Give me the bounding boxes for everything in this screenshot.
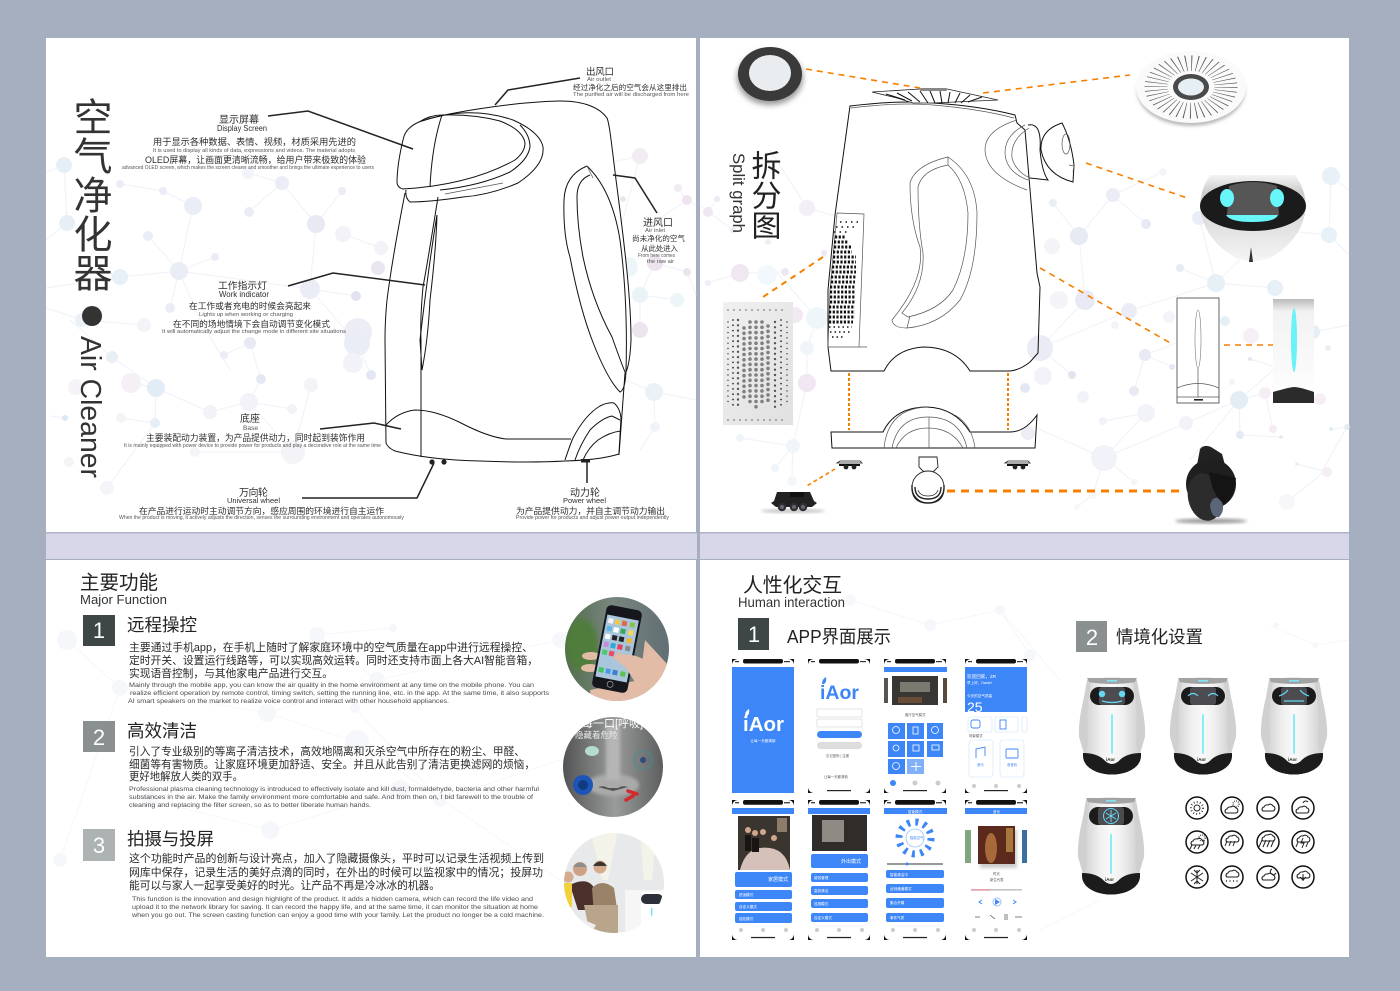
- callout: display screen: advanced OLED screen, which makes the screen clearer and smoother and brings the ultimate experience to users: [122, 165, 374, 171]
- app screen: splash: 让每一天都清新: [750, 738, 776, 743]
- molecule background pattern: [844, 594, 1349, 930]
- callout: base: Base: [243, 425, 258, 432]
- callout: work indicator: [162, 279, 347, 335]
- app screen: sleep mode: 此刻通道模式: [890, 886, 912, 891]
- feature 1: remote control: 1: [93, 618, 105, 643]
- panel: human interaction: [700, 560, 1349, 957]
- feature 3: camera and casting: when you go out. The screen casting function can enjoy a good time with your family. Let the product no longer be a cold machine.: [131, 912, 544, 919]
- heading: major function: [80, 572, 167, 607]
- callout: air inlet: From here comes: [638, 253, 675, 259]
- app screen: music player: 音乐: [993, 809, 1001, 814]
- perforated plate on body: [828, 213, 867, 347]
- app screen: sleep mode: 集合开模: [890, 900, 905, 905]
- app screen: login: iAor: [820, 683, 860, 704]
- orange dashed connectors: [760, 69, 1273, 491]
- app screen: dashboard: 欢迎回家，ZR: [967, 673, 997, 680]
- exploded body line drawing: [828, 88, 1074, 448]
- robot expression: sad: [1261, 678, 1327, 774]
- callout: base: It is mainly equipped with power device to provide power for products and play a decorative role at the same time: [124, 443, 381, 449]
- feature 3: camera and casting: 网库中保存，记录生活的美好点滴的同时，在外出的时候可以监视家中的情况；投屏功: [129, 865, 543, 879]
- callout: universal wheel: Universal wheel: [227, 496, 280, 505]
- feature 1: remote control: [83, 615, 550, 705]
- feature 3: camera and casting: This function is the innovation and design highlight of the product. It adds a hidden camera, which can record the life video and: [132, 896, 533, 903]
- app screen: family mode: 独处模式: [739, 916, 754, 921]
- top vent blade: [872, 88, 998, 103]
- app screen: sleep mode: 智能空气: [910, 835, 924, 840]
- heading: major function: 主要功能: [80, 572, 158, 594]
- callout: work indicator: 工作指示灯: [218, 279, 267, 292]
- title: split graph: Split graph: [729, 153, 747, 233]
- callout: display screen: 用于显示各种数据、表情、视频，材质采用先进的: [153, 136, 356, 147]
- callout: display screen: Display Screen: [217, 124, 267, 133]
- leader lines: [268, 78, 657, 498]
- app screen: login: 忘记密码 | 注册: [826, 753, 850, 758]
- feature 1: remote control: AI smart speakers on the market to realize voice control and interact with other household appliances.: [128, 698, 449, 705]
- app screen: family mode: 家居模式: [768, 876, 788, 883]
- title: air cleaner: Air Cleaner: [74, 336, 106, 478]
- weather icon set: [1186, 797, 1314, 888]
- title: split graph: 拆分图: [746, 150, 782, 240]
- callout: display screen: [122, 113, 374, 171]
- app screen: music player: [965, 800, 1027, 940]
- callout: universal wheel: 在产品进行运动时主动调节方向，感应周围的环境进行自主运作: [139, 505, 384, 516]
- callout: work indicator: 在不同的场地情境下会自动调节变化模式: [173, 318, 330, 329]
- app screen: sleep mode: 事件气质: [890, 915, 905, 920]
- app screen: dashboard: 今天的空气质量: [967, 693, 993, 698]
- feature 2: efficient cleaning: cleaning and replacing the filter screen, so as to better liberate human hands.: [129, 802, 371, 809]
- callout: display screen: 显示屏幕: [219, 113, 259, 126]
- app screen: away mode: 自定义模式: [814, 915, 832, 920]
- feature 3: camera and casting: 拍摄与投屏: [127, 829, 214, 849]
- bottom base shell: [831, 407, 1037, 448]
- app screen: music player: 时光: [993, 871, 1000, 876]
- app screen: away mode: 外出模式: [841, 858, 861, 865]
- photo: nose and airborne hazards: 每一口[呼吸]: [582, 716, 643, 730]
- callout: air inlet: 尚未净化的空气: [632, 233, 685, 243]
- app screen: dashboard: 音乐: [977, 762, 984, 767]
- robot expression: snow mode: [1078, 798, 1144, 894]
- callout: universal wheel: [119, 486, 405, 521]
- app screen: sleep mode: [884, 800, 947, 940]
- heading: human interaction: [738, 574, 845, 610]
- feature 1: remote control: 实现语音控制，与其他家电产品进行交互。: [129, 666, 333, 680]
- feature 1: remote control: realize efficient operation by remote control, timing switch, setting the running line, etc. in the app. At the same time, it also supports: [130, 690, 550, 697]
- app screen: home grid: [884, 659, 947, 793]
- feature 2: efficient cleaning: 细菌等有害物质。让家庭环境更加舒适、安全。并且从此告别了清洁更换滤网的烦恼，: [129, 757, 535, 771]
- section 2 heading: scenario settings: 2: [1086, 625, 1098, 650]
- section 1 heading: app interface: 1: [748, 622, 760, 647]
- feature 1: remote control: 远程操控: [127, 615, 197, 635]
- app screen: home grid: 客厅空气模式: [905, 712, 926, 717]
- callout: universal wheel: 万向轮: [239, 486, 268, 499]
- part: robot face: [1200, 175, 1306, 262]
- callout: work indicator: 在工作或者充电的时候会亮起来: [189, 300, 311, 311]
- power wheel drawing: [912, 457, 944, 503]
- feature 1: remote control: Mainly through the mobile app, you can know the air quality in the home environment at any time on the mobile phone. You can: [129, 682, 534, 689]
- feature 3: camera and casting: [83, 829, 544, 919]
- caster drawings: [837, 461, 1030, 469]
- panel: product structure: [46, 38, 696, 532]
- app screen: login: 让每一天都清新: [824, 774, 848, 779]
- app screen: sleep mode: 智能模式: [908, 809, 923, 814]
- app screen: dashboard: 早上好，Daniel: [967, 680, 992, 685]
- feature 3: camera and casting: 这个功能时产品的创新与设计亮点，加入了隐藏摄像头，平时可以记录生活视频上传到: [129, 851, 544, 865]
- callout: power wheel: [516, 486, 670, 521]
- feature 2: efficient cleaning: substances in the air. Make the family environment more comfortable and safe. And from then on, I bid farewell to the trouble of: [129, 794, 533, 801]
- photo: nose and airborne hazards: 隐藏着危险: [575, 730, 618, 740]
- callout: power wheel: Power wheel: [563, 496, 606, 505]
- callout: air outlet: [573, 66, 689, 98]
- app screen: family mode: 自定义模式: [739, 904, 757, 909]
- callout: base: 主要装配动力装置，为产品提供动力，同时起到装饰作用: [146, 432, 365, 443]
- callout: power wheel: 为产品提供动力，并自主调节动力输出: [516, 505, 665, 516]
- feature 2: efficient cleaning: 引入了专业级别的等离子清洁技术，高效地隔离和灭杀空气中所存在的粉尘、甲醛、: [129, 744, 525, 758]
- part: power wheel: [1175, 446, 1247, 524]
- feature 1: remote control: 主要通过手机app，在手机上随时了解家庭环境中的空气质量在app中进行远程操控、: [129, 640, 533, 654]
- heading: major function: Major Function: [80, 592, 167, 607]
- part: perforated plate: [723, 302, 793, 425]
- app screen: away mode: 巡视模式: [814, 901, 829, 906]
- product line drawing: [385, 101, 631, 465]
- robot expression: smiling eyes: [1170, 678, 1236, 774]
- app screen: login: [808, 659, 870, 793]
- callout: air inlet: 从此处进入: [641, 243, 678, 253]
- robot expression: smiling eyes: iAor: [1197, 757, 1206, 762]
- callout: power wheel: Provide power for products and adjust power output independently: [516, 515, 670, 521]
- app screen: family mode: 舒适模式: [739, 892, 754, 897]
- robot expression: happy: iAor: [1106, 757, 1115, 762]
- app screen: sleep mode: 智能清洁中: [890, 872, 908, 877]
- app screen: dashboard: [965, 659, 1027, 793]
- feature 3: camera and casting: upload it to the network library for saving. It can record the happy life, and at the same time, it can monitor the situation at home: [132, 904, 538, 911]
- panel: split graph: [700, 38, 1350, 532]
- feature 2: efficient cleaning: [83, 721, 540, 809]
- title: air cleaner: [68, 97, 112, 478]
- part: lit front panel: [1273, 299, 1314, 403]
- divider strip: [46, 532, 1349, 559]
- title: split graph: [729, 150, 782, 240]
- panel: major function: [46, 560, 696, 957]
- heading: human interaction: Human interaction: [738, 594, 845, 610]
- callout: air inlet: the raw air: [647, 259, 674, 265]
- callout: air inlet: Air inlet: [645, 228, 666, 234]
- molecule background pattern: [46, 148, 696, 495]
- photo: family on sofa: [564, 833, 664, 933]
- callout: display screen: OLED屏幕，让画面更清晰流畅，给用户带来极致的体验: [145, 154, 367, 165]
- callout: work indicator: It will automatically adjust the change mode in different site situations: [162, 329, 347, 335]
- callout: base: 底座: [240, 412, 260, 425]
- title: air cleaner: 空气净化器: [68, 97, 112, 292]
- callout: work indicator: Work indicator: [219, 290, 269, 299]
- feature 3: camera and casting: 能可以与家人一起享受美好的时光。让产品不再是冷冰冰的机器。: [129, 878, 440, 892]
- part: vent disc: [1136, 51, 1246, 126]
- app screen: music player: 新生代表: [990, 877, 1004, 882]
- feature 2: efficient cleaning: 更好地解放人类的双手。: [129, 769, 243, 783]
- section 1 heading: app interface: [738, 618, 891, 650]
- molecule background pattern: [700, 150, 1350, 510]
- robot expression: happy: [1079, 678, 1145, 774]
- app screen: away mode: [808, 800, 870, 940]
- feature 2: efficient cleaning: 2: [93, 725, 105, 750]
- callout: air inlet: [632, 217, 685, 265]
- part: dark top ring: [737, 47, 803, 105]
- app screen: away mode: 能效管理: [814, 875, 829, 880]
- robot expression: sad: iAor: [1288, 757, 1297, 762]
- callout: air outlet: 出风口: [586, 66, 614, 78]
- app screen: dashboard: 场景模式: [969, 733, 983, 738]
- callout: base: [124, 412, 381, 449]
- section 2 heading: scenario settings: [1076, 621, 1203, 652]
- feature 1: remote control: 定时开关、设置运行线路等，可以实现高效运转。同时还支持市面上各大AI智能音箱，: [129, 653, 538, 667]
- section 1 heading: app interface: APP界面展示: [787, 627, 891, 647]
- app screen: splash: [732, 659, 794, 793]
- feature 3: camera and casting: 3: [93, 833, 105, 858]
- app screen: splash: iAor: [743, 714, 784, 736]
- feature 2: efficient cleaning: 高效清洁: [127, 721, 197, 741]
- app screen: dashboard: 25: [967, 699, 983, 715]
- callout: universal wheel: When the product is moving, it actively adjusts the direction, senses the surrounding environment and operates autonomously: [119, 515, 405, 521]
- callout: display screen: It is used to display all kinds of data, expressions and videos. The material adopts: [153, 148, 356, 154]
- callout: air inlet: 进风口: [643, 217, 673, 229]
- part: universal wheel: [761, 492, 825, 513]
- app screen: dashboard: 收音机: [1007, 762, 1018, 767]
- callout: work indicator: Lights up when working or charging: [199, 312, 293, 318]
- section 2 heading: scenario settings: 情境化设置: [1116, 627, 1203, 647]
- photo: phone in hand: [565, 597, 669, 701]
- photo: nose and airborne hazards: [563, 717, 663, 817]
- part: front panel line drawing: [1177, 298, 1219, 403]
- callout: air outlet: 经过净化之后的空气会从这里排出: [573, 82, 687, 92]
- app screen: away mode: 高效清洁: [814, 888, 829, 893]
- callout: air outlet: Air outlet: [587, 77, 612, 83]
- feature 2: efficient cleaning: Professional plasma cleaning technology is introduced to effectively isolate and kill dust, formaldehyde, bacteria and other harmful: [129, 786, 540, 793]
- app screen: family mode: [732, 800, 794, 940]
- heading: human interaction: 人性化交互: [743, 574, 842, 597]
- callout: air outlet: The purified air will be discharged from here: [573, 92, 689, 98]
- molecule background pattern: [53, 624, 568, 880]
- robot expression: snow mode: iAor: [1105, 877, 1114, 882]
- callout: power wheel: 动力轮: [570, 486, 600, 499]
